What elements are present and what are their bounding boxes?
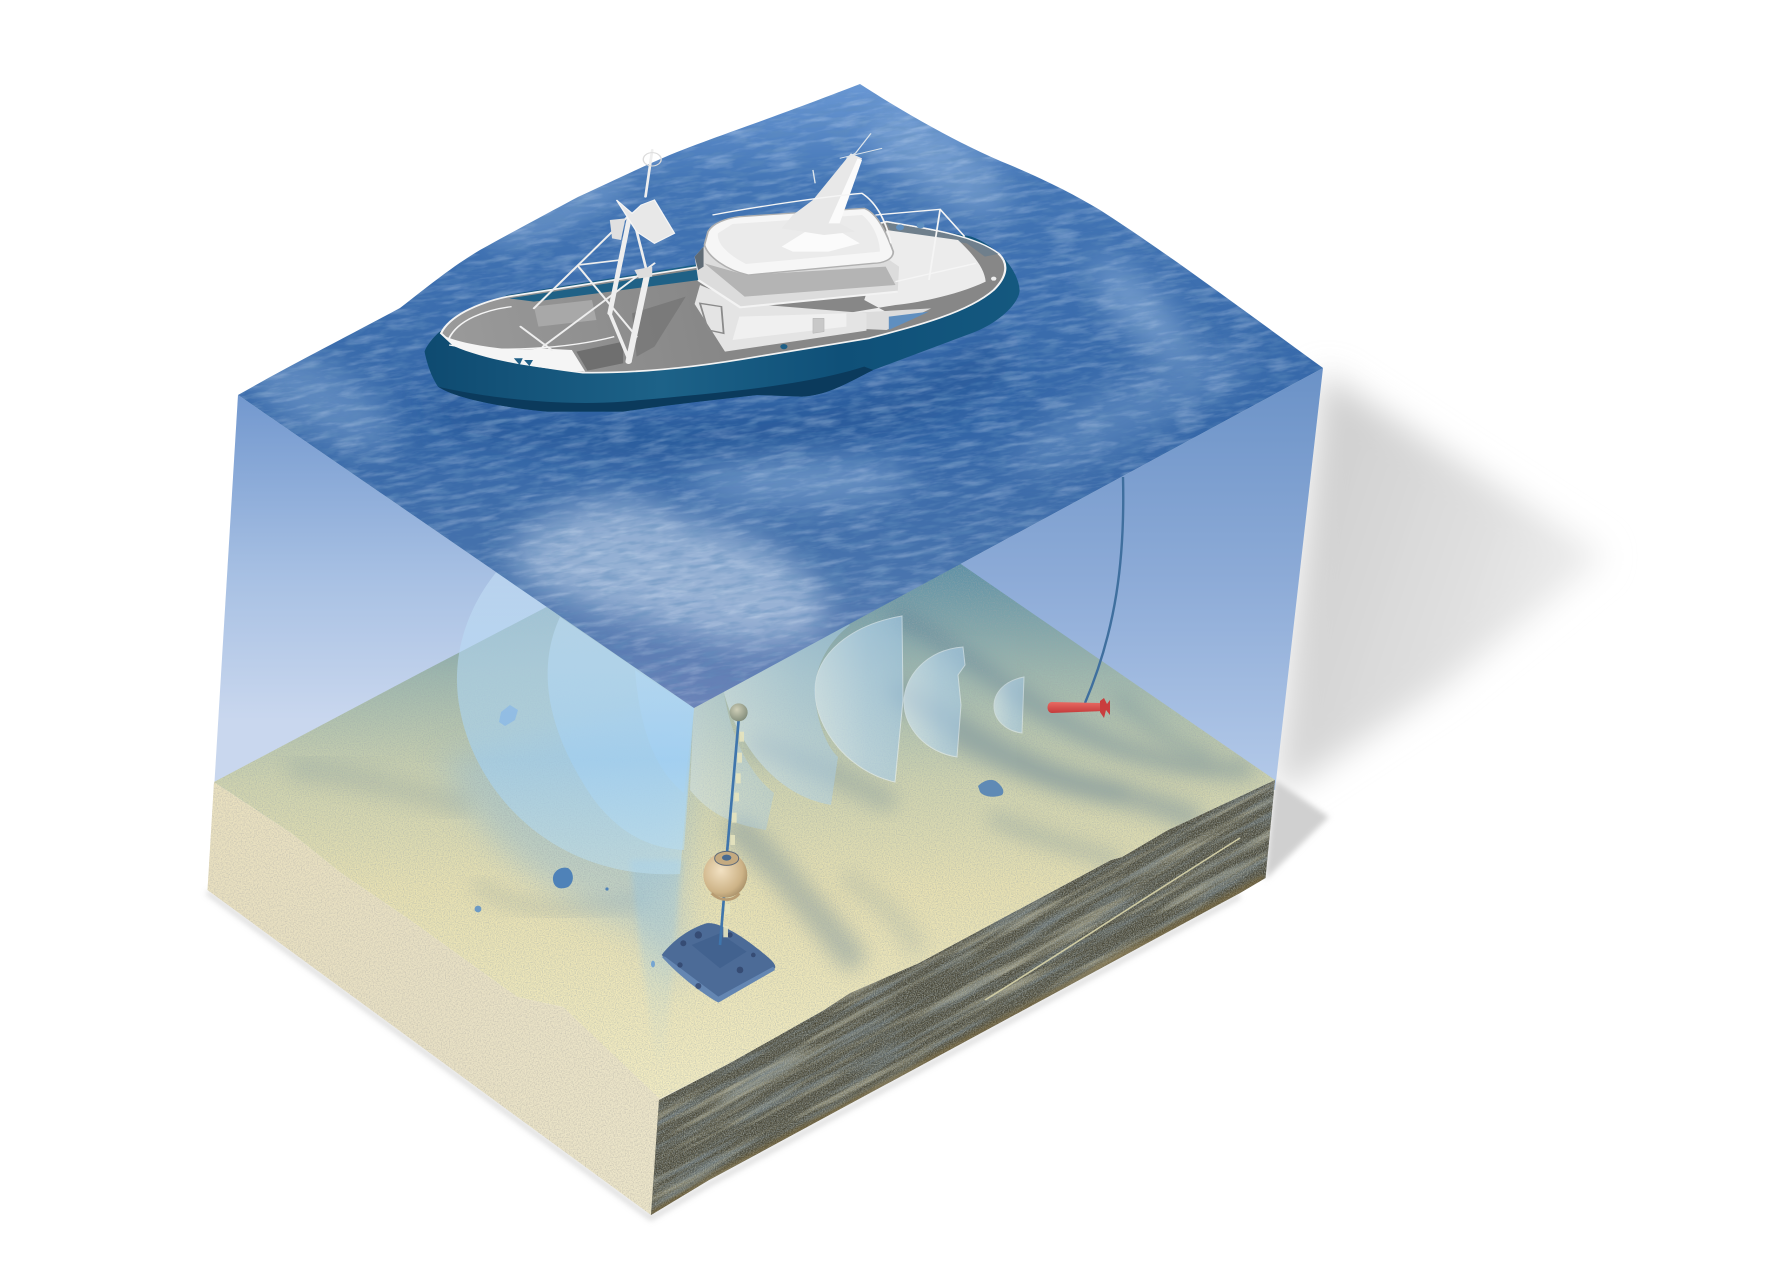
forward superstructure xyxy=(846,230,986,328)
blue haze over the sand xyxy=(444,743,697,988)
deck fittings xyxy=(514,358,533,366)
small top float xyxy=(730,703,748,721)
hull xyxy=(425,222,1020,412)
plume of disturbed water xyxy=(508,502,825,644)
wave front 3 xyxy=(815,616,903,782)
cast shadow on page xyxy=(207,372,1606,1218)
wave front 2 xyxy=(904,647,965,757)
wheelhouse xyxy=(704,208,893,275)
seafloor rocks xyxy=(475,705,1003,967)
water column back panels xyxy=(214,368,1323,800)
blue water tint below the near wave fronts xyxy=(630,860,682,1098)
line segments xyxy=(720,720,739,945)
sound wave fronts from the tow fish xyxy=(457,570,1024,874)
seabed block: right dark strata face xyxy=(651,780,1275,1215)
surface wave texture xyxy=(238,84,1322,704)
mooring: anchor, float and instrument line xyxy=(662,703,775,1003)
seabed block: left sand face xyxy=(200,770,670,1220)
cable tags xyxy=(723,732,744,937)
illustration: sonar survey block diagram xyxy=(206,84,1594,1222)
large float xyxy=(703,852,747,898)
sea surface (top of block) xyxy=(238,84,1323,708)
ship shadow on water xyxy=(446,348,998,464)
deck rails xyxy=(449,193,976,349)
wave front 1 (nearest the tow fish) xyxy=(994,677,1024,733)
wave front 6 xyxy=(548,617,694,850)
aft mast and rigging xyxy=(521,150,654,362)
wave front 4 xyxy=(724,600,850,805)
tow cable xyxy=(1085,477,1123,703)
tow fish (red) xyxy=(1048,698,1110,718)
lower deckhouse xyxy=(695,285,866,352)
deck xyxy=(441,222,1005,373)
seabed surface with sand ripples xyxy=(214,564,1275,1099)
lighter swell patches xyxy=(229,95,1260,505)
wave front 5 xyxy=(690,660,774,830)
anchor block xyxy=(662,923,775,1002)
middle deck xyxy=(695,247,899,307)
wave front 5, left of the near edge xyxy=(635,670,694,793)
wave front 7 (largest) xyxy=(457,570,694,874)
research ship xyxy=(425,133,1020,412)
bulwark xyxy=(509,269,699,302)
radar mast xyxy=(782,153,862,235)
stern works xyxy=(445,336,585,372)
